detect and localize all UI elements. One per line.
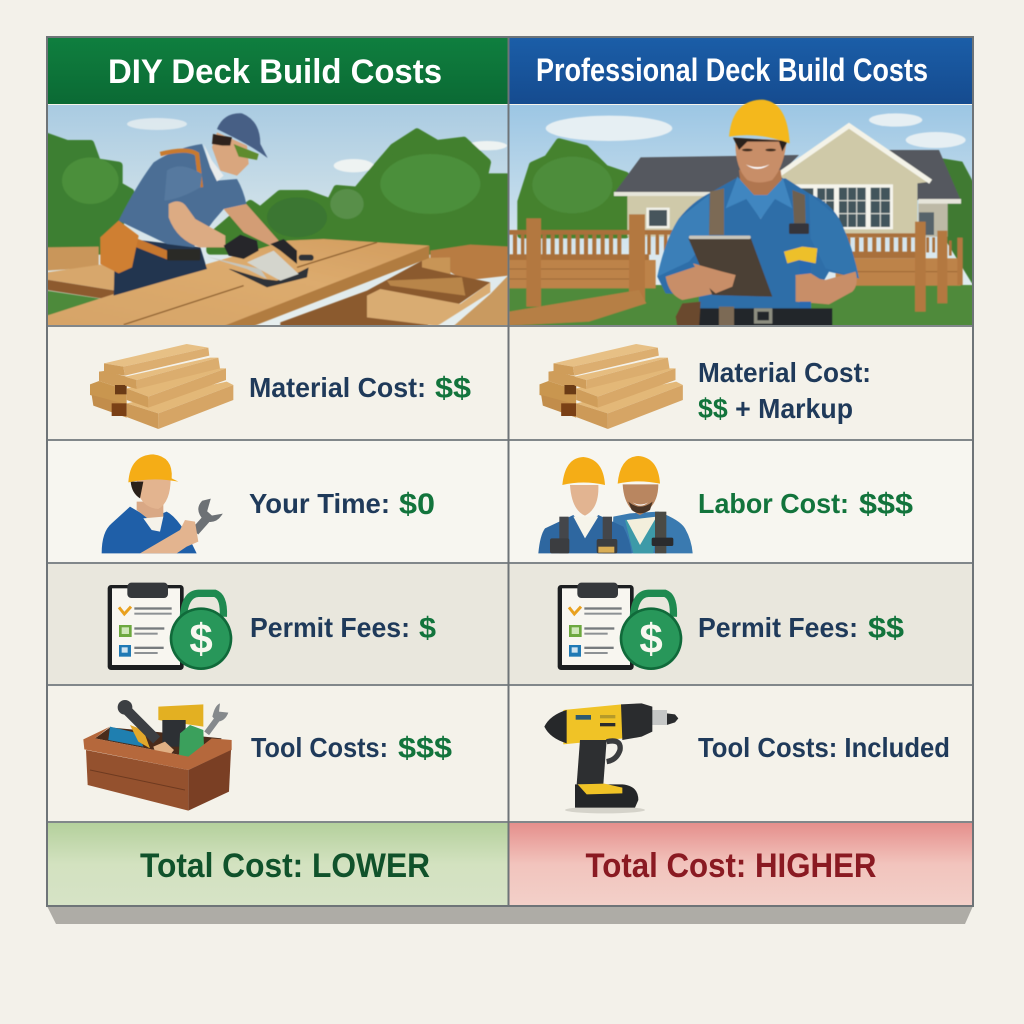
row 1 left: material cost: $$ (435, 372, 471, 405)
icon: power drill (544, 703, 678, 813)
photo: professional contractor and house (509, 100, 973, 327)
row 1 left: material cost (90, 344, 471, 429)
header: DIY (47, 37, 508, 104)
header: Professional: Professional Deck Build Costs (536, 52, 928, 88)
row 3 right: permit fees: $$ (868, 612, 904, 645)
row 1 left: material cost: Material Cost: (249, 372, 426, 403)
row 2 left: your time (102, 454, 435, 553)
icon: permit clipboard with dollar (108, 583, 232, 670)
row 3 right: permit fees: Permit Fees: (698, 612, 858, 643)
row 4 left: tool costs: $$$ (398, 732, 452, 765)
icon: lumber stack pro (539, 344, 683, 429)
row 2 right: labor cost (538, 456, 913, 553)
icon: lumber stack (90, 344, 233, 429)
total: higher (509, 823, 973, 906)
row 2 right: labor cost: $$$ (859, 488, 913, 521)
row 4 right: tools included: Tool Costs: Included (698, 732, 950, 763)
row 1 right: material cost with markup (539, 344, 871, 429)
icon: permit clipboard with dollar pro (558, 583, 682, 670)
icon: DIY worker with wrench (102, 454, 221, 553)
row 3 right: permit fees (558, 583, 904, 670)
total: lower (48, 823, 508, 906)
header: DIY: DIY Deck Build Costs (108, 53, 442, 91)
row 3 left: permit fees (108, 583, 436, 670)
row 1 right: material cost with markup: $$ + Markup (698, 393, 853, 424)
table shadow (47, 906, 973, 924)
photo: DIY worker cutting lumber (44, 105, 508, 326)
total: lower: Total Cost: LOWER (140, 847, 430, 885)
row 2 left: your time: Your Time: (249, 488, 390, 519)
row 1 right: material cost with markup: Material Cost: (698, 357, 871, 388)
icon: toolbox (83, 700, 232, 811)
total: higher: Total Cost: HIGHER (586, 847, 876, 885)
row backgrounds (48, 327, 972, 822)
comparison table (44, 37, 973, 906)
row 4 left: tool costs (83, 700, 452, 811)
row 2 right: labor cost: Labor Cost: (698, 488, 849, 519)
row 4 left: tool costs: Tool Costs: (251, 732, 388, 763)
icon: two workers (538, 456, 693, 553)
icon: permit clipboard with dollar: $ (189, 615, 213, 662)
icon: permit clipboard with dollar pro: $ (639, 615, 663, 662)
header: Professional (509, 37, 973, 104)
row 4 right: tools included (544, 703, 950, 813)
row 2 left: your time: $0 (399, 488, 435, 521)
row 3 left: permit fees: Permit Fees: (250, 612, 410, 643)
row 3 left: permit fees: $ (419, 612, 436, 645)
